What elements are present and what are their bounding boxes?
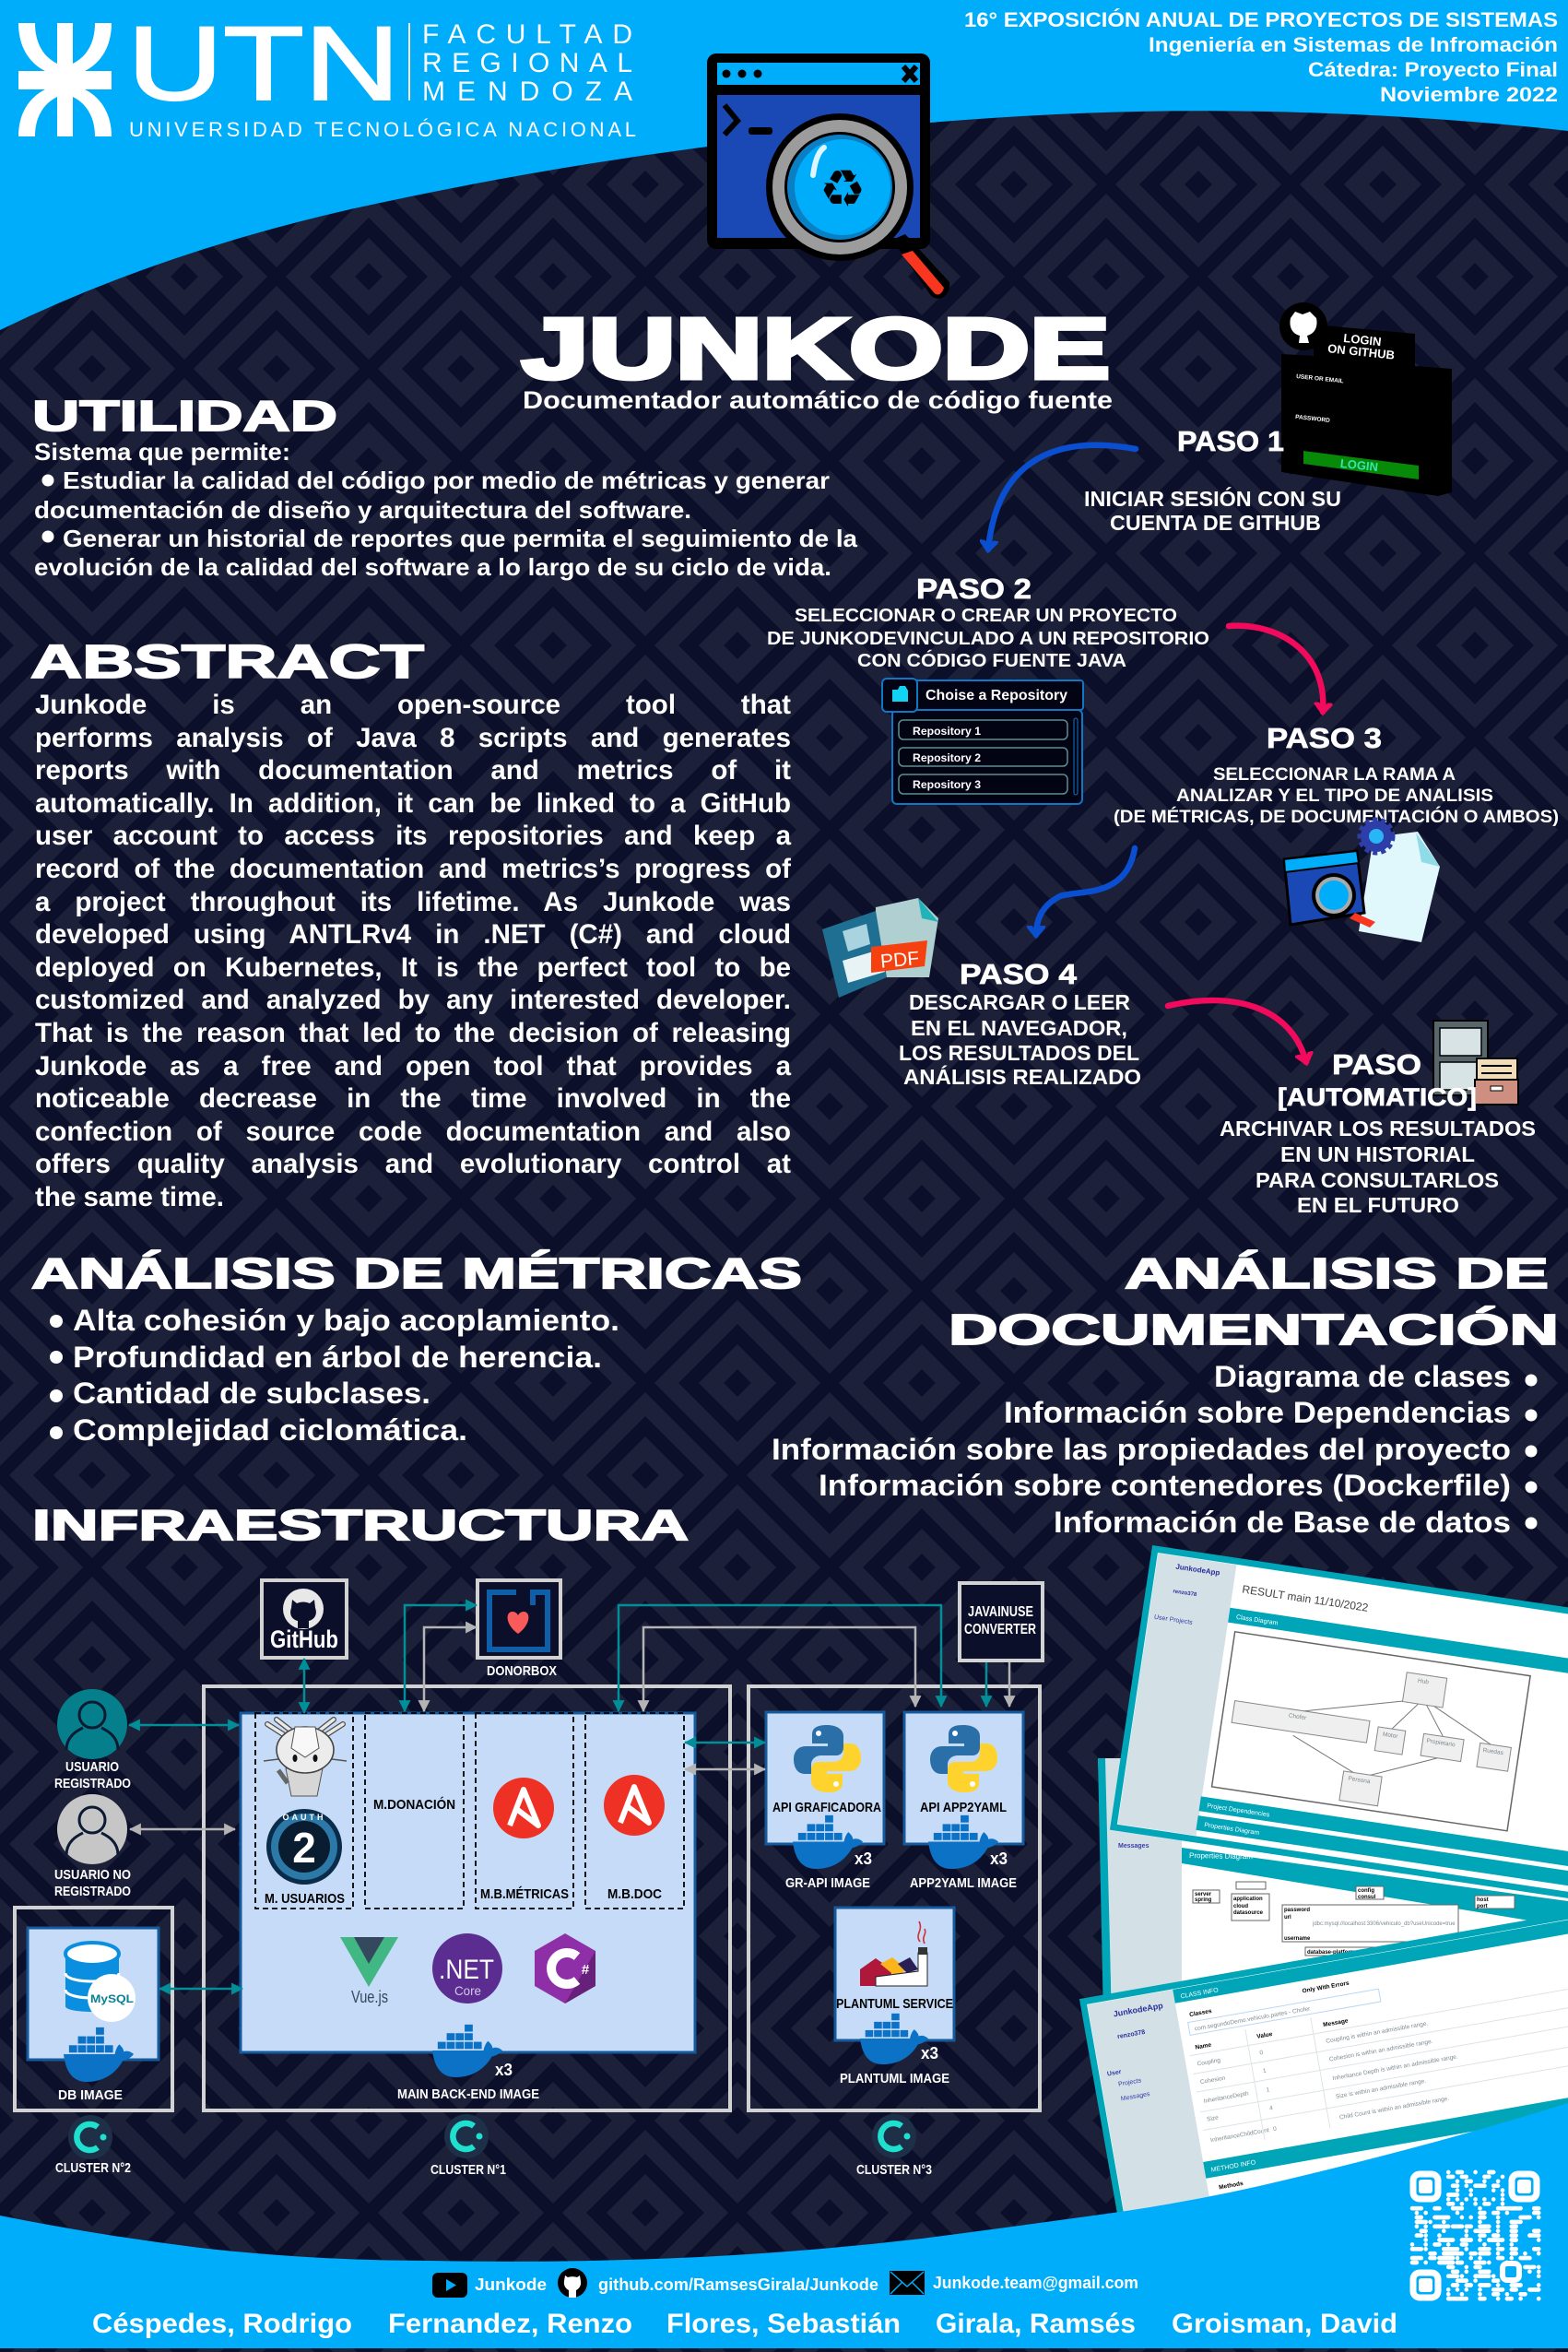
- abstract text block: reports with documentation and metrics of it: [35, 755, 791, 786]
- automatic step text: ARCHIVAR LOS RESULTADOS: [1220, 1117, 1536, 1141]
- repository 1: Repository 1: [913, 725, 981, 738]
- x3 replicas: x3: [855, 1850, 872, 1868]
- app name: JunkodeApp: [1113, 2001, 1164, 2018]
- login button label: LOGIN: [1339, 456, 1379, 474]
- property node text: password: [1284, 1908, 1310, 1913]
- property node text: username: [1284, 1936, 1311, 1942]
- e-mail address: Junkode.team@gmail.com: [933, 2274, 1138, 2292]
- sidebar messages: Messages: [1120, 2091, 1151, 2102]
- app name: JunkodeApp: [1175, 1563, 1220, 1578]
- user name: renzo378: [1117, 2029, 1146, 2040]
- step 2 text: CON CÓDIGO FUENTE JAVA: [857, 649, 1126, 671]
- cluster 2 label: CLUSTER N°2: [55, 2161, 131, 2176]
- user field label: USER OR EMAIL: [1296, 373, 1344, 384]
- panel: analisis de metricas: [31, 1249, 802, 1447]
- heading: ABSTRACT: ABSTRACT: [30, 635, 424, 688]
- sidebar projects: Projects: [1118, 2077, 1142, 2088]
- icon: database cylinders: [65, 1943, 119, 2012]
- repository 3: Repository 3: [913, 778, 981, 791]
- abstract text block: deployed on Kubernetes, It is the perfect tool to be: [35, 952, 791, 983]
- abstract text block: record of the documentation and metrics’s progress of: [35, 854, 791, 884]
- table header: [1195, 2017, 1349, 2051]
- author 2: Fernandez, Renzo: [388, 2309, 632, 2339]
- user: registered: [54, 1689, 131, 1791]
- JavaInUse converter box: CONVERTER: [964, 1622, 1036, 1637]
- class info title: CLASS INFO: [1180, 1987, 1220, 2001]
- logo divider: [408, 23, 410, 100]
- classes label: Classes: [1189, 2008, 1212, 2018]
- property nodes: [1193, 1882, 1515, 1956]
- user: not registered: [54, 1794, 131, 1899]
- JavaInUse converter box: [960, 1583, 1043, 1661]
- bullet: [42, 474, 53, 487]
- abstract text block: That is the reason that led to the decision of releasing: [35, 1018, 791, 1048]
- abstract text block: confection of source code documentation and also: [35, 1117, 791, 1147]
- QR center top-right: [1517, 2180, 1531, 2193]
- table rows: 0: [1259, 2050, 1264, 2057]
- panel: API Graficadora: [766, 1712, 884, 1844]
- classes: [1280, 1660, 1513, 1804]
- abstract text block: customized and analyzed by any interested developer.: [35, 985, 791, 1015]
- utilidad line 3: Generar un historial de reportes que permita el seguimiento de la: [63, 525, 858, 552]
- abstract text block: Junkode as a free and open tool that provides a: [35, 1051, 791, 1081]
- QR data modules: [1412, 2172, 1539, 2299]
- icon: UTN emblem: [18, 23, 112, 136]
- abstract text block: the same time.: [35, 1182, 224, 1212]
- QR center bottom-left: [1419, 2278, 1432, 2292]
- subtitle: Documentador automático de código fuente: [523, 386, 1113, 414]
- icon: Ansible metrics: [493, 1778, 554, 1838]
- user: registered: REGISTRADO: [54, 1776, 131, 1791]
- property node text: application: [1233, 1897, 1263, 1902]
- icon: Docker graficadora: [793, 1815, 863, 1869]
- event information: [964, 8, 1558, 106]
- table rows: 1: [1263, 2068, 1267, 2074]
- icon: folder: [892, 686, 908, 702]
- property node text: consul: [1358, 1895, 1376, 1900]
- panel: analisis de documentacion: [772, 1249, 1559, 1539]
- screenshot: properties diagram: [1098, 1758, 1568, 2038]
- abstract text block: developed using ANTLRv4 in .NET (C#) and cloud: [35, 919, 791, 950]
- database panel: [28, 1928, 159, 2060]
- automatic step heading: [AUTOMATICO]: [1278, 1083, 1477, 1111]
- JavaInUse converter box: JAVAINUSE: [968, 1604, 1033, 1620]
- QR finder top-right: [1512, 2174, 1537, 2199]
- step 4 text: LOS RESULTADOS DEL: [899, 1041, 1139, 1065]
- icon: C sharp: [535, 1933, 595, 2003]
- step 4 text: EN EL NAVEGADOR,: [911, 1016, 1127, 1040]
- step 4 heading: PASO 4: [960, 958, 1078, 990]
- table rows: InheritanceChildCount: [1210, 2127, 1269, 2144]
- table rows: InheritanceDepth: [1203, 2090, 1250, 2105]
- FACULTAD line: FACULTAD: [422, 19, 632, 50]
- icon: Docker main: [432, 2025, 502, 2077]
- footer blue wave: [0, 2103, 1568, 2348]
- icon: browser window with magnifier: [707, 53, 949, 299]
- abstract text block: performs analysis of Java 8 scripts and generates: [35, 723, 791, 753]
- UTN logo: [18, 6, 636, 141]
- REGIONAL line: REGIONAL: [422, 48, 632, 78]
- title: JUNKODE: JUNKODE: [522, 301, 1110, 396]
- classes: Hub: [1417, 1678, 1430, 1685]
- icon: Python: [794, 1725, 861, 1792]
- heading: INFRAESTRUCTURA: INFRAESTRUCTURA: [32, 1501, 689, 1549]
- classes: Propietario: [1426, 1738, 1456, 1748]
- bullet: [42, 531, 53, 542]
- abstract text block: a project throughout its lifetime. As Junkode was: [35, 887, 791, 917]
- table rows: [1197, 2016, 1466, 2144]
- contact links: [432, 2268, 1138, 2298]
- table rows: Coupling is within an admissible range.: [1326, 2020, 1429, 2045]
- YouTube channel: Junkode: [475, 2275, 547, 2294]
- abstract text block: automatically. In addition, it can be linked to a GitHub: [35, 788, 791, 819]
- panel: PlantUML service: [835, 1908, 954, 2040]
- table rows: 0: [1273, 2126, 1278, 2133]
- GR-API image label: GR-API IMAGE: [785, 1875, 870, 1891]
- automatic step text: [1220, 1117, 1536, 1217]
- header blue wave: [0, 0, 1568, 330]
- user name: renzo378: [1173, 1589, 1197, 1598]
- table rows: Coupling: [1197, 2057, 1221, 2068]
- event line 3: Cátedra: Proyecto Final: [1308, 58, 1558, 81]
- icon: cluster 1: [444, 2114, 489, 2158]
- PlantUML image label: PLANTUML IMAGE: [840, 2071, 949, 2086]
- method info title: METHOD INFO: [1210, 2159, 1256, 2174]
- GitHub repository: github.com/RamsesGirala/Junkode: [598, 2275, 878, 2294]
- step 2 text: SELECCIONAR O CREAR UN PROYECTO: [795, 606, 1177, 626]
- sidebar links: User Projects: [1154, 1614, 1194, 1626]
- QR finder bottom-left: [1413, 2273, 1438, 2298]
- sidebar nav: User: [1107, 2069, 1122, 2078]
- classes: Ruedas: [1482, 1747, 1504, 1756]
- metric 2: Profundidad en árbol de herencia.: [73, 1341, 602, 1374]
- x3 replicas: x3: [921, 2044, 938, 2062]
- doc item 3: Información sobre las propiedades del proyecto: [772, 1433, 1511, 1466]
- property node text: datasource: [1233, 1910, 1264, 1916]
- table rows: Child Count is within an admissible range.: [1339, 2096, 1450, 2122]
- icon: GitHub: [558, 2268, 587, 2298]
- method info bar: [1203, 2079, 1568, 2179]
- arrow: step 3 to step 4: [1036, 848, 1135, 935]
- QR code: [1412, 2172, 1539, 2299]
- property node text: server: [1195, 1892, 1212, 1897]
- PDF text: PDF: [879, 948, 920, 973]
- QR finder top-left: [1413, 2174, 1438, 2199]
- author 4: Girala, Ramsés: [936, 2309, 1136, 2339]
- cluster 3 frame: [749, 1686, 1040, 2110]
- x3 replicas main: x3: [495, 2061, 513, 2079]
- login button: [1303, 451, 1419, 479]
- bar title: Class Diagram: [1235, 1614, 1279, 1627]
- icon: OAuth 2 badge: OAUTH: [282, 1813, 326, 1822]
- step 2 text: DE JUNKODEVINCULADO A UN REPOSITORIO: [767, 629, 1209, 649]
- classes input: [1188, 1989, 1381, 2035]
- step 2 text: [767, 606, 1209, 671]
- author 5: Groisman, David: [1172, 2309, 1397, 2339]
- automatic step text: EN UN HISTORIAL: [1280, 1142, 1475, 1166]
- Donorbox service box: DONORBOX: [487, 1663, 557, 1679]
- Donorbox service box: [477, 1580, 560, 1679]
- table header: Value: [1256, 2031, 1273, 2040]
- result title: RESULT main 11/10/2022: [1242, 1583, 1370, 1614]
- password field label: PASSWORD: [1295, 414, 1330, 424]
- cluster 1 frame: [204, 1686, 730, 2110]
- property node text: jdbc:mysql://localhost:3306/vehiculo_db?useUnicode=true: [1312, 1921, 1456, 1927]
- arrow: step 2 to step 3: [1229, 626, 1323, 712]
- classes: Motor: [1382, 1731, 1399, 1740]
- dependencies title: Project Dependencies: [1207, 1802, 1270, 1819]
- automatic step text: PARA CONSULTARLOS: [1256, 1168, 1499, 1192]
- metric 1: Alta cohesión y bajo acoplamiento.: [73, 1304, 619, 1337]
- icon: Ansible documentation: [604, 1775, 665, 1836]
- table rows: Size is within an admissible range.: [1336, 2078, 1427, 2100]
- unregistered user label: USUARIO NO: [54, 1867, 131, 1883]
- abstract text block: offers quality analysis and evolutionary control at: [35, 1149, 791, 1179]
- doc item 2: Información sobre Dependencias: [1004, 1396, 1511, 1429]
- icon: OAuth 2 badge: 2: [292, 1824, 316, 1872]
- heading line 1: ANÁLISIS DE: [1125, 1249, 1549, 1297]
- abstract text block: user account to access its repositories and keep a: [35, 821, 791, 851]
- M.B.METRICAS label: M.B.MÉTRICAS: [480, 1886, 569, 1902]
- screenshot: class info table: [1083, 1902, 1568, 2274]
- automatic step heading: PASO: [1332, 1048, 1421, 1081]
- user: not registered: REGISTRADO: [54, 1884, 131, 1899]
- icon: GitHub login card: [1279, 302, 1452, 496]
- arrow: step 4 to automatic step: [1168, 1000, 1306, 1062]
- icon: .NET Core: Core: [454, 1983, 481, 1998]
- PlantUML service label: PLANTUML SERVICE: [836, 1996, 953, 2012]
- step 1 heading: PASO 1: [1177, 425, 1284, 457]
- icon: Junkode mascot: [264, 1720, 347, 1796]
- arrow: step 1 to step 2: [988, 445, 1136, 550]
- UTN wordmark: UTN: [127, 6, 400, 123]
- icon: Docker PlantUML: [860, 2014, 928, 2064]
- step 3 text: (DE MÉTRICAS, DE DOCUMENTACIÓN O AMBOS): [1114, 807, 1559, 827]
- icon: document with magnifier and gear: [1284, 820, 1440, 942]
- automatic step heading: [1278, 1048, 1477, 1111]
- properties bar title: Properties Diagram: [1189, 1851, 1253, 1861]
- event line 1: 16° EXPOSICIÓN ANUAL DE PROYECTOS DE SISTEMAS: [964, 8, 1558, 31]
- properties diagram bar: [1196, 1815, 1568, 1895]
- abstract text block: [35, 690, 791, 1212]
- step 3 text: ANALIZAR Y EL TIPO DE ANALISIS: [1176, 786, 1493, 806]
- database image label: DB IMAGE: [58, 2087, 123, 2103]
- table rows: 1: [1266, 2086, 1270, 2094]
- step 2 heading: PASO 2: [916, 573, 1032, 605]
- heading line 2: DOCUMENTACIÓN: [949, 1306, 1559, 1353]
- repository selector mockup: [882, 679, 1083, 804]
- utilidad line 2: documentación de diseño y arquitectura del software.: [34, 496, 691, 524]
- table rows: 4: [1269, 2105, 1274, 2112]
- authors: [92, 2309, 1397, 2339]
- metric 3: Cantidad de subclases.: [73, 1377, 430, 1410]
- icon: recycle symbol: ♻: [819, 160, 866, 219]
- classes: Chofer: [1288, 1712, 1307, 1721]
- icon: OAuth 2 badge: [266, 1809, 342, 1885]
- LOGIN text: LOGIN: [1343, 331, 1382, 349]
- input text: com.segundoDemo.vehiculo.partes - Chofer: [1194, 2005, 1312, 2032]
- icon: Docker app2yaml: [928, 1815, 998, 1869]
- properties bar: [1182, 1848, 1568, 1927]
- main image label: MAIN BACK-END IMAGE: [397, 2086, 539, 2102]
- QR center top-left: [1419, 2180, 1432, 2193]
- property node text: url: [1284, 1915, 1291, 1921]
- icon: file cabinet and box: [1433, 1021, 1518, 1105]
- property node text: spring: [1195, 1897, 1212, 1903]
- doc item 5: Información de Base de datos: [1054, 1506, 1511, 1539]
- classes: Persona: [1348, 1776, 1371, 1785]
- methods label: Methods: [1219, 2181, 1244, 2191]
- step 3 heading: PASO 3: [1267, 722, 1382, 754]
- icon: cluster 2: [68, 2115, 112, 2159]
- icon: MySQL: [88, 1974, 136, 2022]
- icon: cluster 3: [872, 2114, 916, 2158]
- diagram connections: [1289, 1681, 1500, 1796]
- connector arrows: [129, 1605, 1009, 1989]
- panel: utilidad: [32, 392, 858, 581]
- property node text: host: [1477, 1897, 1489, 1903]
- table rows: Cohesion is within an admissible range.: [1328, 2039, 1433, 2063]
- App2Yaml image label: APP2YAML IMAGE: [910, 1875, 1017, 1891]
- icon: Vue.js: Vue.js: [351, 1988, 388, 2006]
- diagram frame: [1212, 1632, 1530, 1831]
- selector title: Choise a Repository: [925, 688, 1067, 703]
- repository 2: Repository 2: [913, 751, 981, 764]
- table rows: Inheritance Depth is within an admissible range.: [1332, 2053, 1458, 2082]
- only with errors: Only With Errors: [1302, 1980, 1350, 1995]
- screenshot: class diagram: [1114, 1549, 1568, 1903]
- x3 replicas: x3: [990, 1850, 1008, 1868]
- icon: .NET Core: [432, 1933, 502, 2003]
- icon: Python: [930, 1725, 997, 1792]
- property node text: cloud: [1233, 1904, 1248, 1909]
- step 4 text: DESCARGAR O LEER: [909, 990, 1130, 1014]
- university name: UNIVERSIDAD TECNOLÓGICA NACIONAL: [129, 118, 636, 141]
- GitHub service box: GitHub: [270, 1625, 338, 1653]
- step 3 text: SELECCIONAR LA RAMA A: [1213, 765, 1456, 785]
- infrastructure diagram: [15, 1580, 1043, 2178]
- icon: PDF and floppy disk: [822, 898, 938, 998]
- M. USUARIOS label: M. USUARIOS: [265, 1891, 345, 1907]
- automatic step text: EN EL FUTURO: [1297, 1193, 1459, 1217]
- property node text: config: [1358, 1888, 1374, 1894]
- property node text: port: [1477, 1904, 1488, 1909]
- table rows: Size: [1207, 2114, 1220, 2123]
- GitHub service box: [262, 1580, 347, 1658]
- metric 4: Complejidad ciclomática.: [73, 1413, 467, 1447]
- PDF label: [871, 940, 927, 973]
- utilidad line 4: evolución de la calidad del software a lo largo de su ciclo de vida.: [34, 553, 831, 581]
- project dependencies bar: [1199, 1796, 1568, 1875]
- property node text: database-platform: [1307, 1950, 1355, 1956]
- step 4 text: ANÁLISIS REALIZADO: [903, 1064, 1141, 1089]
- registered user label: USUARIO: [65, 1759, 119, 1775]
- step 1 text: INICIAR SESIÓN CON SU: [1084, 486, 1341, 511]
- abstract text block: noticeable decrease in the time involved in the: [35, 1083, 791, 1114]
- author 1: Céspedes, Rodrigo: [92, 2309, 352, 2339]
- cluster 1 label: CLUSTER N°1: [430, 2163, 506, 2178]
- table header: Message: [1323, 2017, 1349, 2028]
- abstract text block: Junkode is an open-source tool that: [35, 690, 791, 720]
- icon: MySQL: MySQL: [90, 1992, 134, 2005]
- QR alignment mark: [1503, 2263, 1519, 2280]
- panel: API App2Yaml: [904, 1712, 1023, 1844]
- icon: .NET Core: .NET: [439, 1955, 494, 1985]
- heading: UTILIDAD: UTILIDAD: [32, 392, 337, 440]
- icon: Docker database: [64, 2027, 134, 2082]
- property node text: [1195, 1888, 1489, 1956]
- M.DONACION label: M.DONACIÓN: [373, 1796, 455, 1813]
- step 1 text: CUENTA DE GITHUB: [1110, 511, 1321, 535]
- doc item 4: Información sobre contenedores (Dockerfile): [819, 1469, 1511, 1502]
- M.B.DOC label: M.B.DOC: [607, 1886, 662, 1902]
- step 1 text: [1084, 486, 1341, 535]
- cluster 3 label: CLUSTER N°3: [856, 2163, 932, 2178]
- event line 4: Noviembre 2022: [1380, 83, 1558, 106]
- heading: analisis de metricas: ANÁLISIS DE MÉTRICAS: [31, 1249, 802, 1297]
- utilidad intro: Sistema que permite:: [34, 438, 290, 466]
- icon: YouTube: [432, 2273, 467, 2298]
- API Graficadora label: API GRAFICADORA: [772, 1800, 881, 1815]
- utilidad line 1: Estudiar la calidad del código por medio de métricas y generar: [63, 467, 830, 494]
- doc item 1: Diagrama de clases: [1214, 1360, 1511, 1393]
- cluster 2 frame: [15, 1908, 172, 2110]
- step 4 text: [899, 990, 1141, 1089]
- class info bar: [1173, 1907, 1568, 2003]
- MENDOZA line: MENDOZA: [422, 77, 632, 107]
- icon: PlantUML factory: [860, 1921, 927, 1986]
- class diagram bar: [1228, 1608, 1568, 1686]
- ON GITHUB text: ON GITHUB: [1327, 341, 1396, 362]
- author 3: Flores, Sebastián: [666, 2309, 901, 2339]
- API App2Yaml label: API APP2YAML: [920, 1800, 1007, 1815]
- table header: Name: [1195, 2042, 1212, 2051]
- event line 2: Ingeniería en Sistemas de Infromación: [1149, 33, 1558, 56]
- table rows: Cohesion: [1200, 2074, 1226, 2086]
- icon: Vue.js: [340, 1937, 398, 2006]
- sidebar link: Messages: [1118, 1843, 1149, 1850]
- main back-end panel: [241, 1713, 695, 2052]
- step 3 text: [1114, 765, 1559, 827]
- icon: C sharp: #: [582, 1962, 590, 1978]
- icon: mail: [890, 2271, 925, 2295]
- properties diagram title: Properties Diagram: [1204, 1822, 1260, 1837]
